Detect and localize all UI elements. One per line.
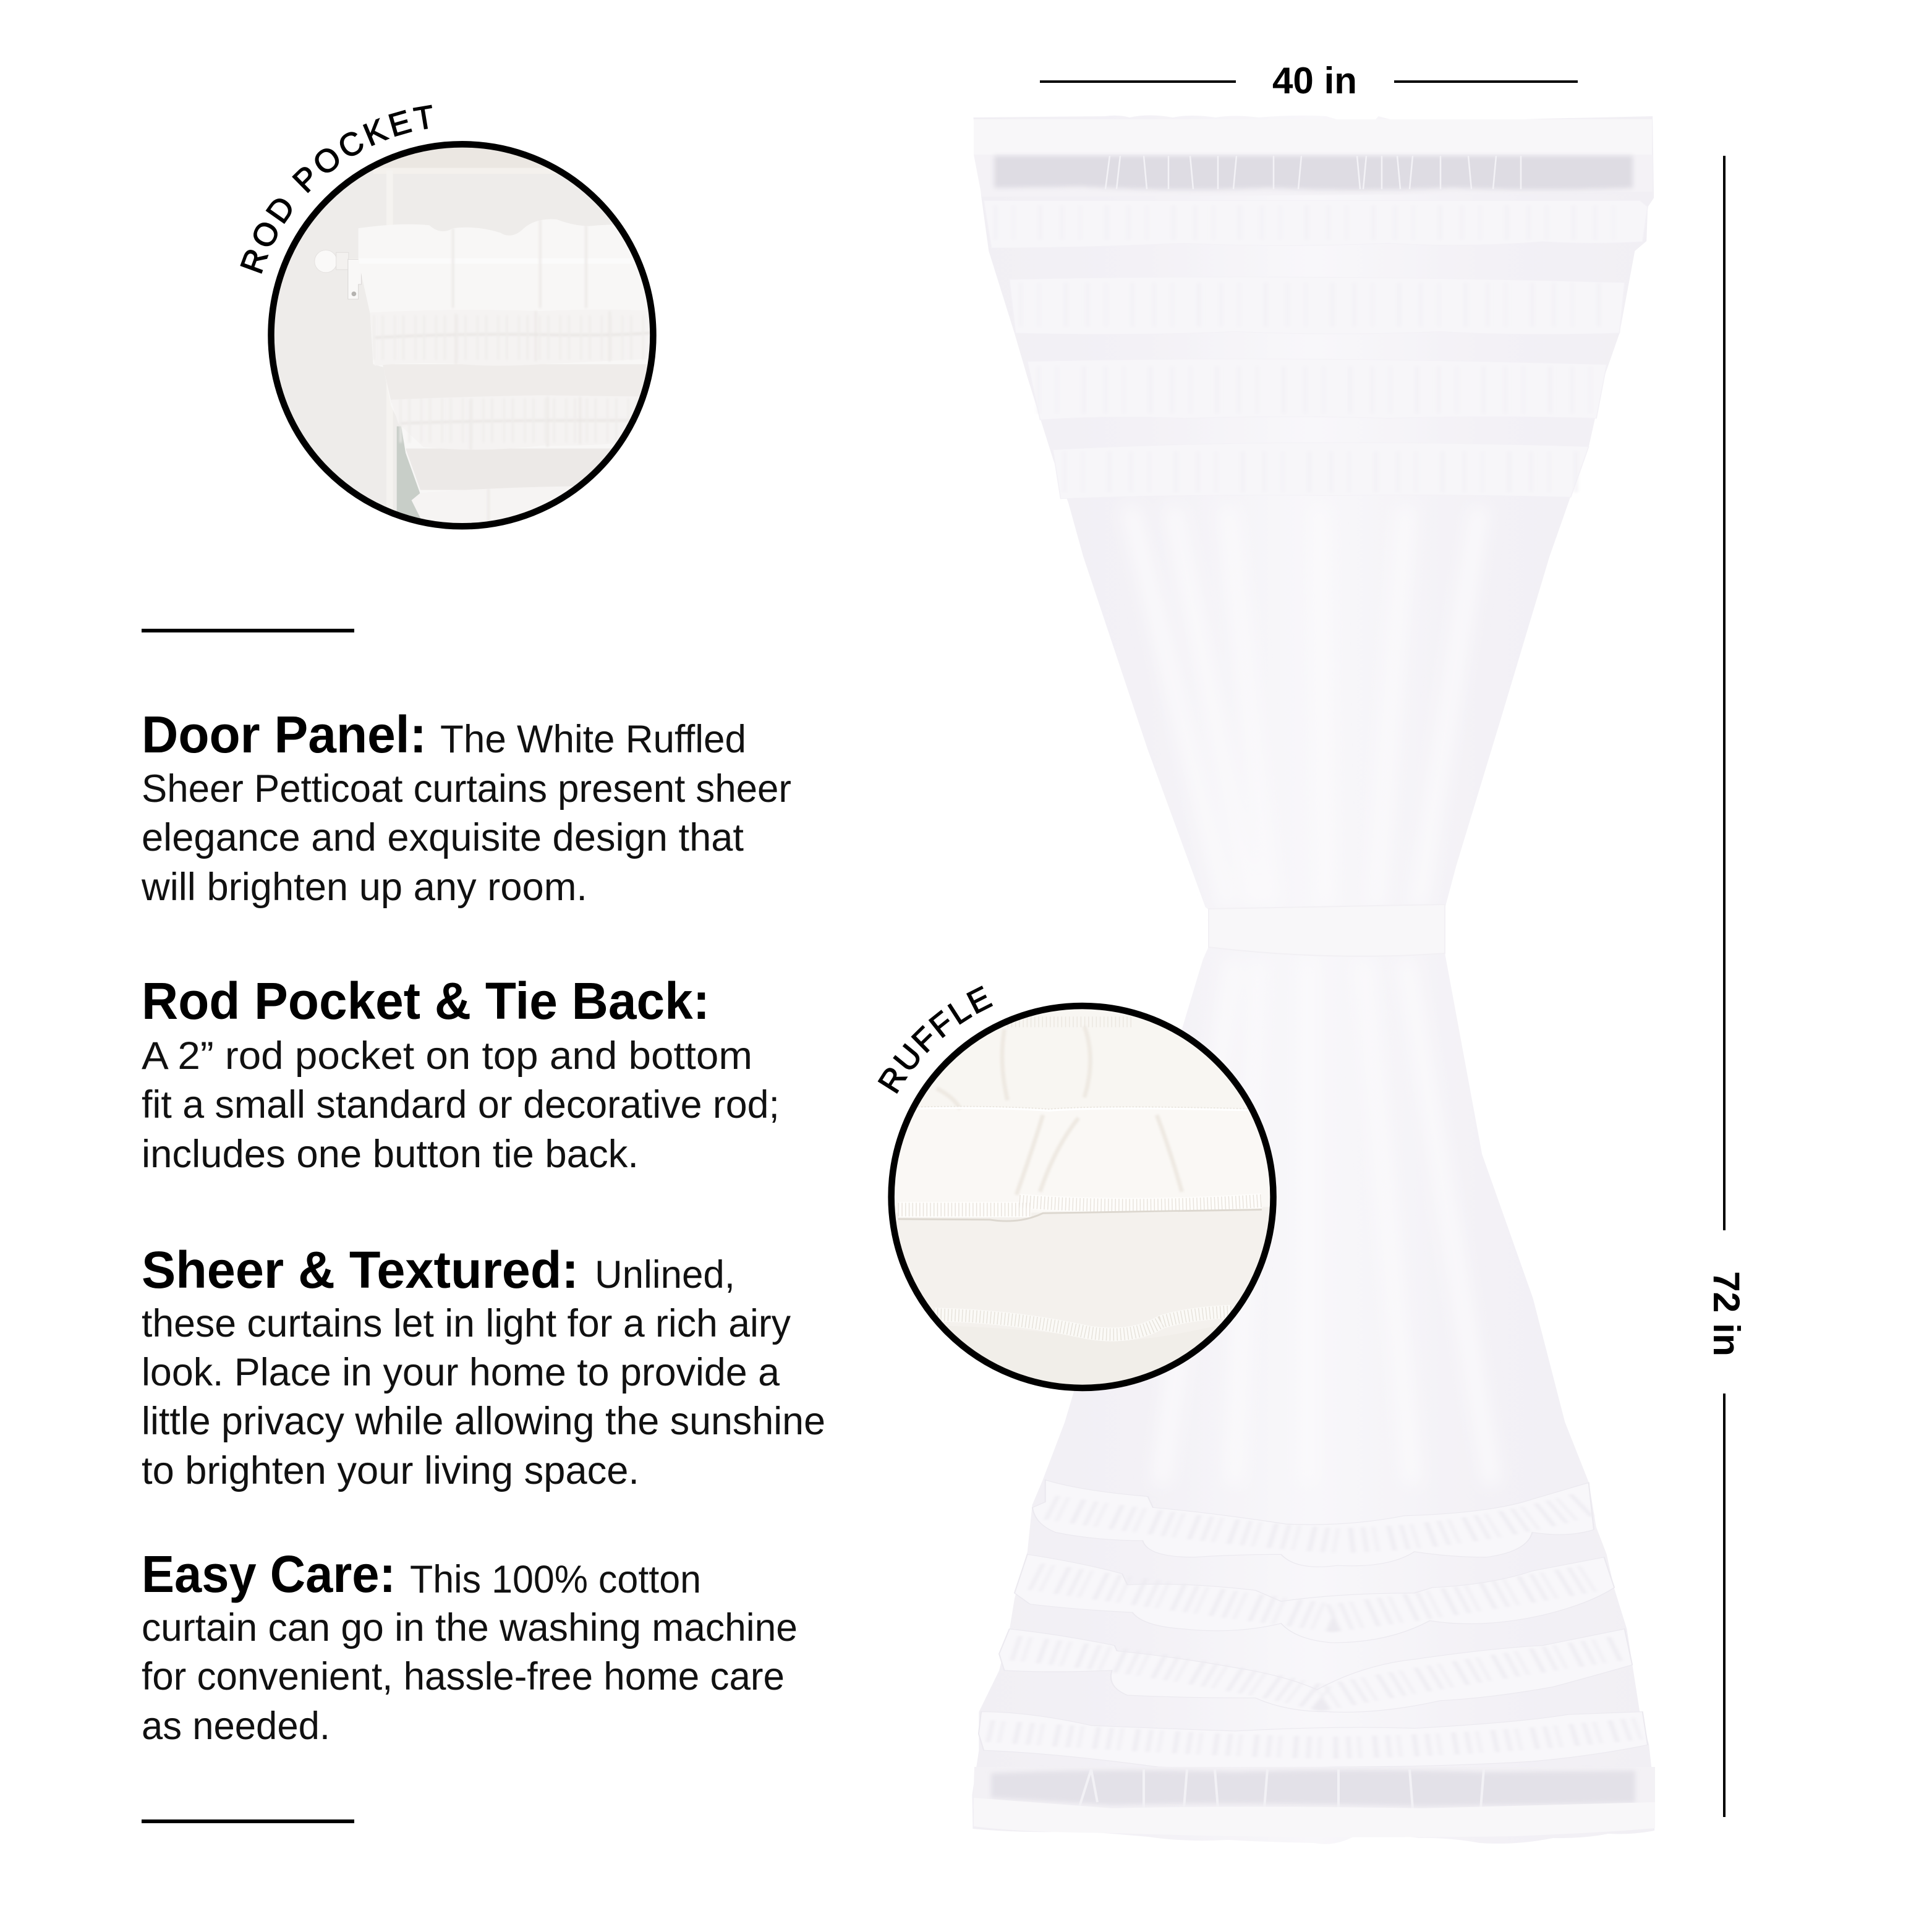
text block: sheer and textured: look. Place in your home to provide a xyxy=(142,1351,780,1394)
text block: easy care: as needed. xyxy=(142,1704,330,1748)
curved label: rod pocket: ROD POCKET xyxy=(240,105,432,274)
curtain fabric silhouette xyxy=(972,115,1654,1844)
dimension: width 40 in: 40 in xyxy=(1272,60,1357,101)
lower ruffles xyxy=(979,1480,1648,1768)
text block: sheer and textured: these curtains let in light for a rich airy xyxy=(142,1302,791,1345)
stitched seams xyxy=(895,1022,1262,1335)
rod pocket band: bottom xyxy=(973,1767,1655,1837)
text block: door panel xyxy=(141,705,791,909)
text block: rod pocket and tie back: Rod Pocket & Tie Back: xyxy=(142,972,710,1030)
rod pocket band: top xyxy=(974,119,1653,197)
text block: easy care: This 100% cotton xyxy=(410,1558,701,1601)
text block: sheer and textured: to brighten your living space. xyxy=(142,1449,639,1492)
photo: rod pocket detail xyxy=(261,134,663,537)
text block: sheer and textured: little privacy while allowing the sunshine xyxy=(142,1400,825,1443)
divider: bottom rule xyxy=(142,1819,354,1823)
curtain rod xyxy=(314,250,362,299)
text block: sheer and textured: Unlined, xyxy=(595,1253,735,1296)
photo: ruffle detail xyxy=(886,1000,1280,1393)
text block: door panel: Sheer Petticoat curtains present sheer xyxy=(142,767,791,811)
curved label: ruffle: RUFFLE xyxy=(878,985,993,1094)
text block: sheer and textured xyxy=(142,1241,825,1492)
drape folds xyxy=(1130,507,1492,1484)
text block: rod pocket and tie back: A 2” rod pocket on top and bottom xyxy=(142,1034,752,1078)
dimension: height 72 in: 72 in xyxy=(1706,1271,1747,1356)
text block: sheer and textured: Sheer & Textured: xyxy=(142,1241,579,1299)
text block: easy care: for convenient, hassle-free home care xyxy=(142,1655,785,1698)
curtain panel xyxy=(972,115,1655,1844)
text block: rod pocket and tie back xyxy=(142,972,780,1176)
callout: rod pocket xyxy=(240,105,657,529)
divider: top rule xyxy=(142,629,354,632)
text block: easy care xyxy=(142,1545,798,1748)
dimension: width 40 in xyxy=(1040,60,1578,101)
text block: door panel: elegance and exquisite design that xyxy=(142,816,744,859)
text block: door panel: will brighten up any room. xyxy=(141,866,587,909)
tie back xyxy=(1209,904,1445,956)
upper ruffles xyxy=(984,200,1648,499)
text block: rod pocket and tie back: fit a small standard or decorative rod; xyxy=(142,1083,780,1126)
text block: door panel: The White Ruffled xyxy=(440,718,746,761)
curtain fabric xyxy=(359,219,660,536)
text block: easy care: curtain can go in the washing machine xyxy=(142,1606,798,1649)
callout: ruffle xyxy=(878,985,1277,1391)
text block: rod pocket and tie back: includes one button tie back. xyxy=(142,1133,639,1176)
dimension: height 72 in xyxy=(1706,156,1747,1817)
text block: door panel: Door Panel: xyxy=(142,705,427,764)
text block: easy care: Easy Care: xyxy=(142,1545,396,1603)
